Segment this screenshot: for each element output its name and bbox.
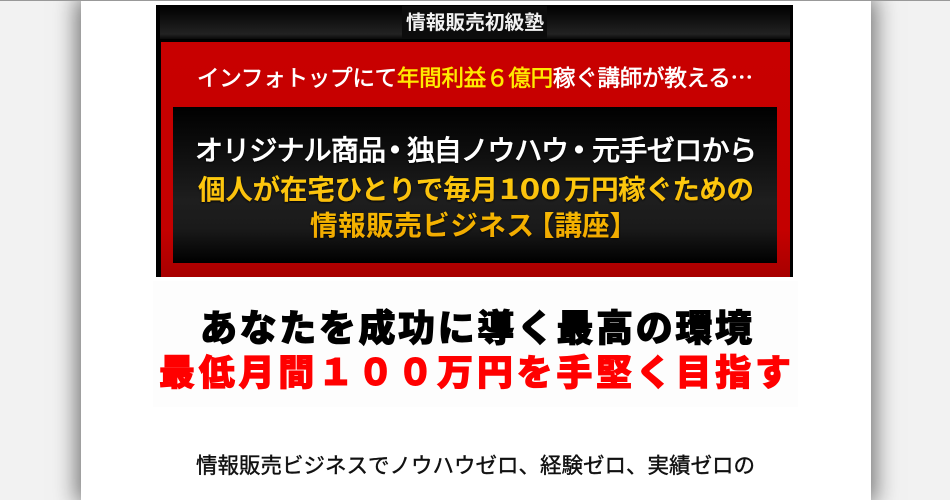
header banner	[156, 5, 793, 277]
course line three	[310, 203, 637, 243]
course line one	[195, 129, 757, 169]
course line three: 【講座】	[527, 203, 637, 243]
course line two: 100	[499, 167, 561, 207]
course line one: ・	[381, 129, 409, 169]
course line one: ・	[565, 129, 593, 169]
title text: 情報販売初級塾	[406, 6, 544, 35]
course line one: 独自ノウハウ	[407, 129, 569, 169]
instructor tagline: インフォトップにて年間利益６億円稼ぐ講師が教える…	[197, 61, 753, 93]
headline image	[153, 281, 798, 407]
course line two: 万円稼ぐための	[564, 167, 754, 207]
course line three: 情報販売ビジネス	[310, 203, 534, 243]
course line two: 個人が在宅ひとりで毎月	[198, 167, 498, 207]
course line two	[198, 167, 754, 207]
course line one: 元手ゼロから	[592, 129, 757, 169]
course line one: オリジナル商品	[195, 129, 386, 169]
black course panel	[173, 107, 777, 263]
red headline: 最低月間１００万円を手堅く目指す	[159, 344, 791, 396]
black headline: あなたを成功に導く最高の環境	[200, 298, 752, 352]
body text: 情報販売ビジネスでノウハウゼロ、経験ゼロ、実績ゼロの	[196, 449, 755, 480]
title bar	[160, 6, 790, 39]
